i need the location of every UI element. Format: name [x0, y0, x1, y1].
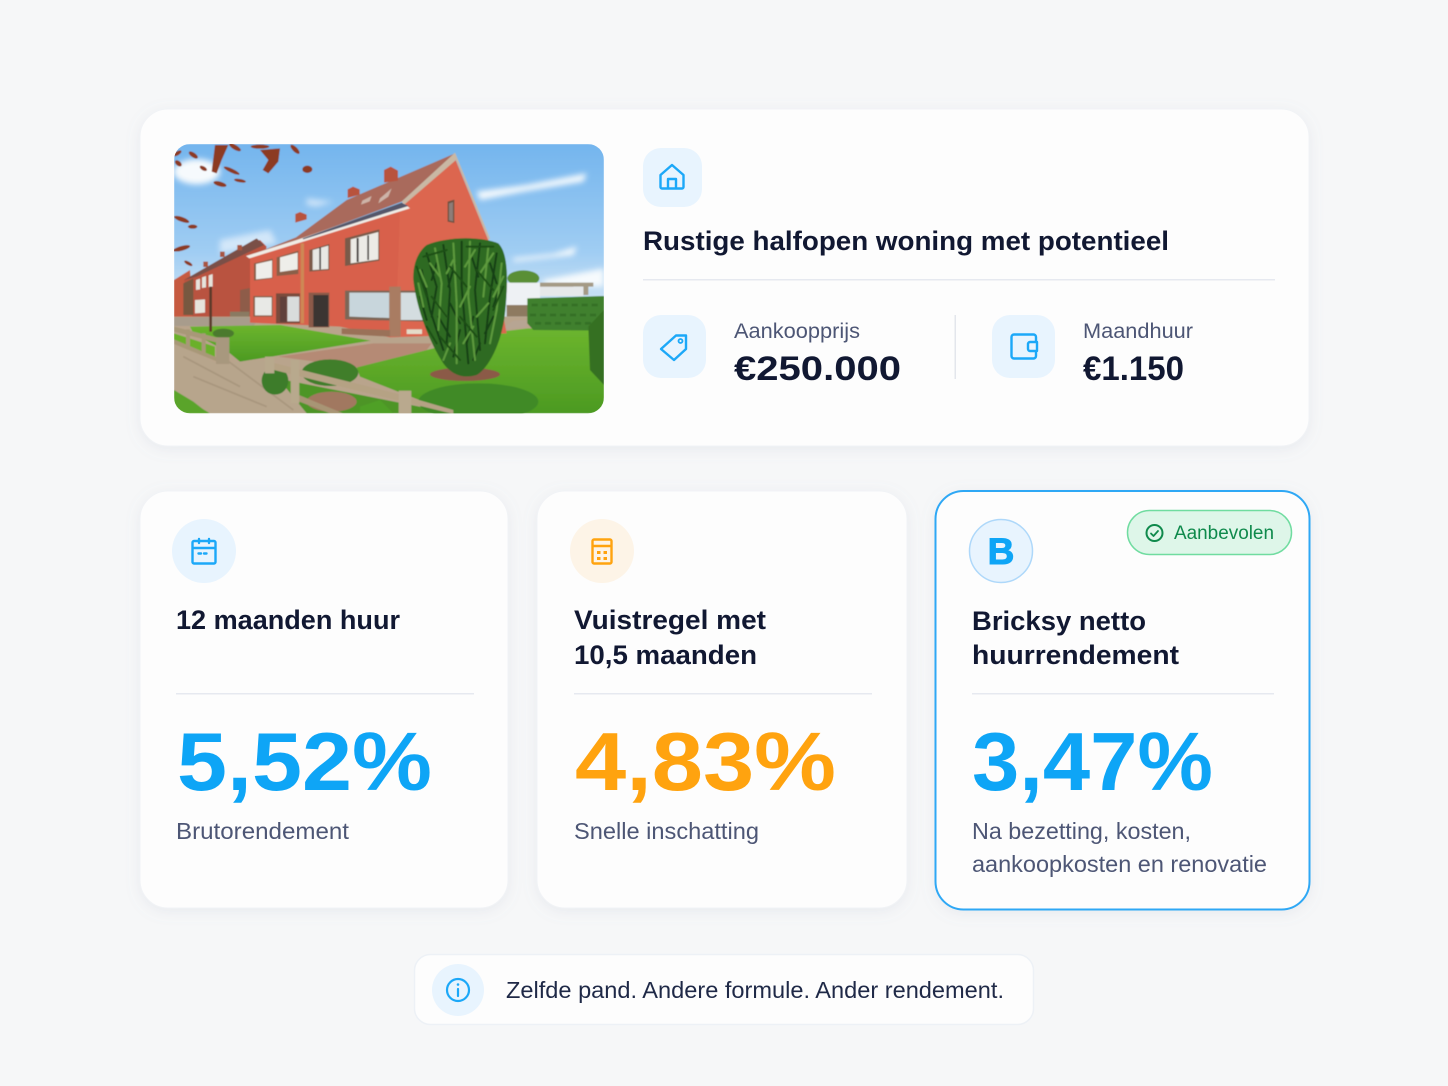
stat: purchase price: €250.000 — [734, 350, 901, 388]
value: 4,83% — [575, 715, 836, 808]
icon: calculator — [570, 519, 634, 583]
value: 5,52% — [177, 715, 432, 808]
image: house photo — [172, 142, 604, 420]
shrubs — [302, 359, 358, 386]
icon: Bricksy logo: B — [988, 531, 1014, 572]
card title — [972, 606, 1179, 670]
icon: calendar — [172, 519, 236, 583]
panel: gross yield — [140, 491, 508, 908]
branches — [172, 142, 312, 267]
heading: Rustige halfopen woning met potentieel — [643, 226, 1169, 256]
card title — [574, 605, 766, 670]
caption — [972, 818, 1267, 877]
card title: 10,5 maanden — [574, 640, 757, 670]
callout text: Zelfde pand. Andere formule. Ander rendement. — [506, 977, 1004, 1003]
front fence — [274, 366, 454, 414]
windows — [345, 229, 379, 266]
card title: 12 maanden huur — [176, 605, 400, 635]
bush — [430, 368, 500, 381]
stat: purchase price: Aankoopprijs — [734, 320, 860, 343]
main house — [390, 158, 507, 337]
caption: Na bezetting, kosten, — [972, 818, 1191, 844]
stat: monthly rent: Maandhuur — [1083, 320, 1193, 343]
icon: house — [643, 148, 702, 207]
card title: Vuistregel met — [574, 605, 766, 635]
panel: net yield — [936, 491, 1310, 910]
callout: summary — [414, 954, 1034, 1024]
badge: recommended: Aanbevolen — [1174, 523, 1274, 544]
caption: aankoopkosten en renovatie — [972, 851, 1267, 877]
stat: monthly rent — [1083, 320, 1193, 388]
icon: price tag — [643, 315, 706, 378]
hedge — [527, 296, 604, 331]
card title: huurrendement — [972, 640, 1179, 670]
icon: wallet — [992, 315, 1055, 378]
icon: info — [432, 964, 484, 1016]
icon: Bricksy logo — [970, 520, 1032, 582]
stat: monthly rent: €1.150 — [1083, 350, 1184, 388]
badge: recommended — [1128, 510, 1292, 554]
value: 3,47% — [972, 715, 1213, 808]
caption: Snelle inschatting — [574, 818, 759, 844]
far houses — [174, 270, 193, 318]
card title: Bricksy netto — [972, 606, 1146, 636]
panel: property — [150, 144, 1298, 448]
caption: Brutorendement — [176, 818, 350, 844]
ground — [174, 316, 532, 414]
stat: purchase price — [734, 320, 901, 388]
background buildings — [507, 270, 539, 286]
left fence and sidewalk — [285, 388, 306, 412]
panel: rule of thumb — [537, 491, 907, 908]
